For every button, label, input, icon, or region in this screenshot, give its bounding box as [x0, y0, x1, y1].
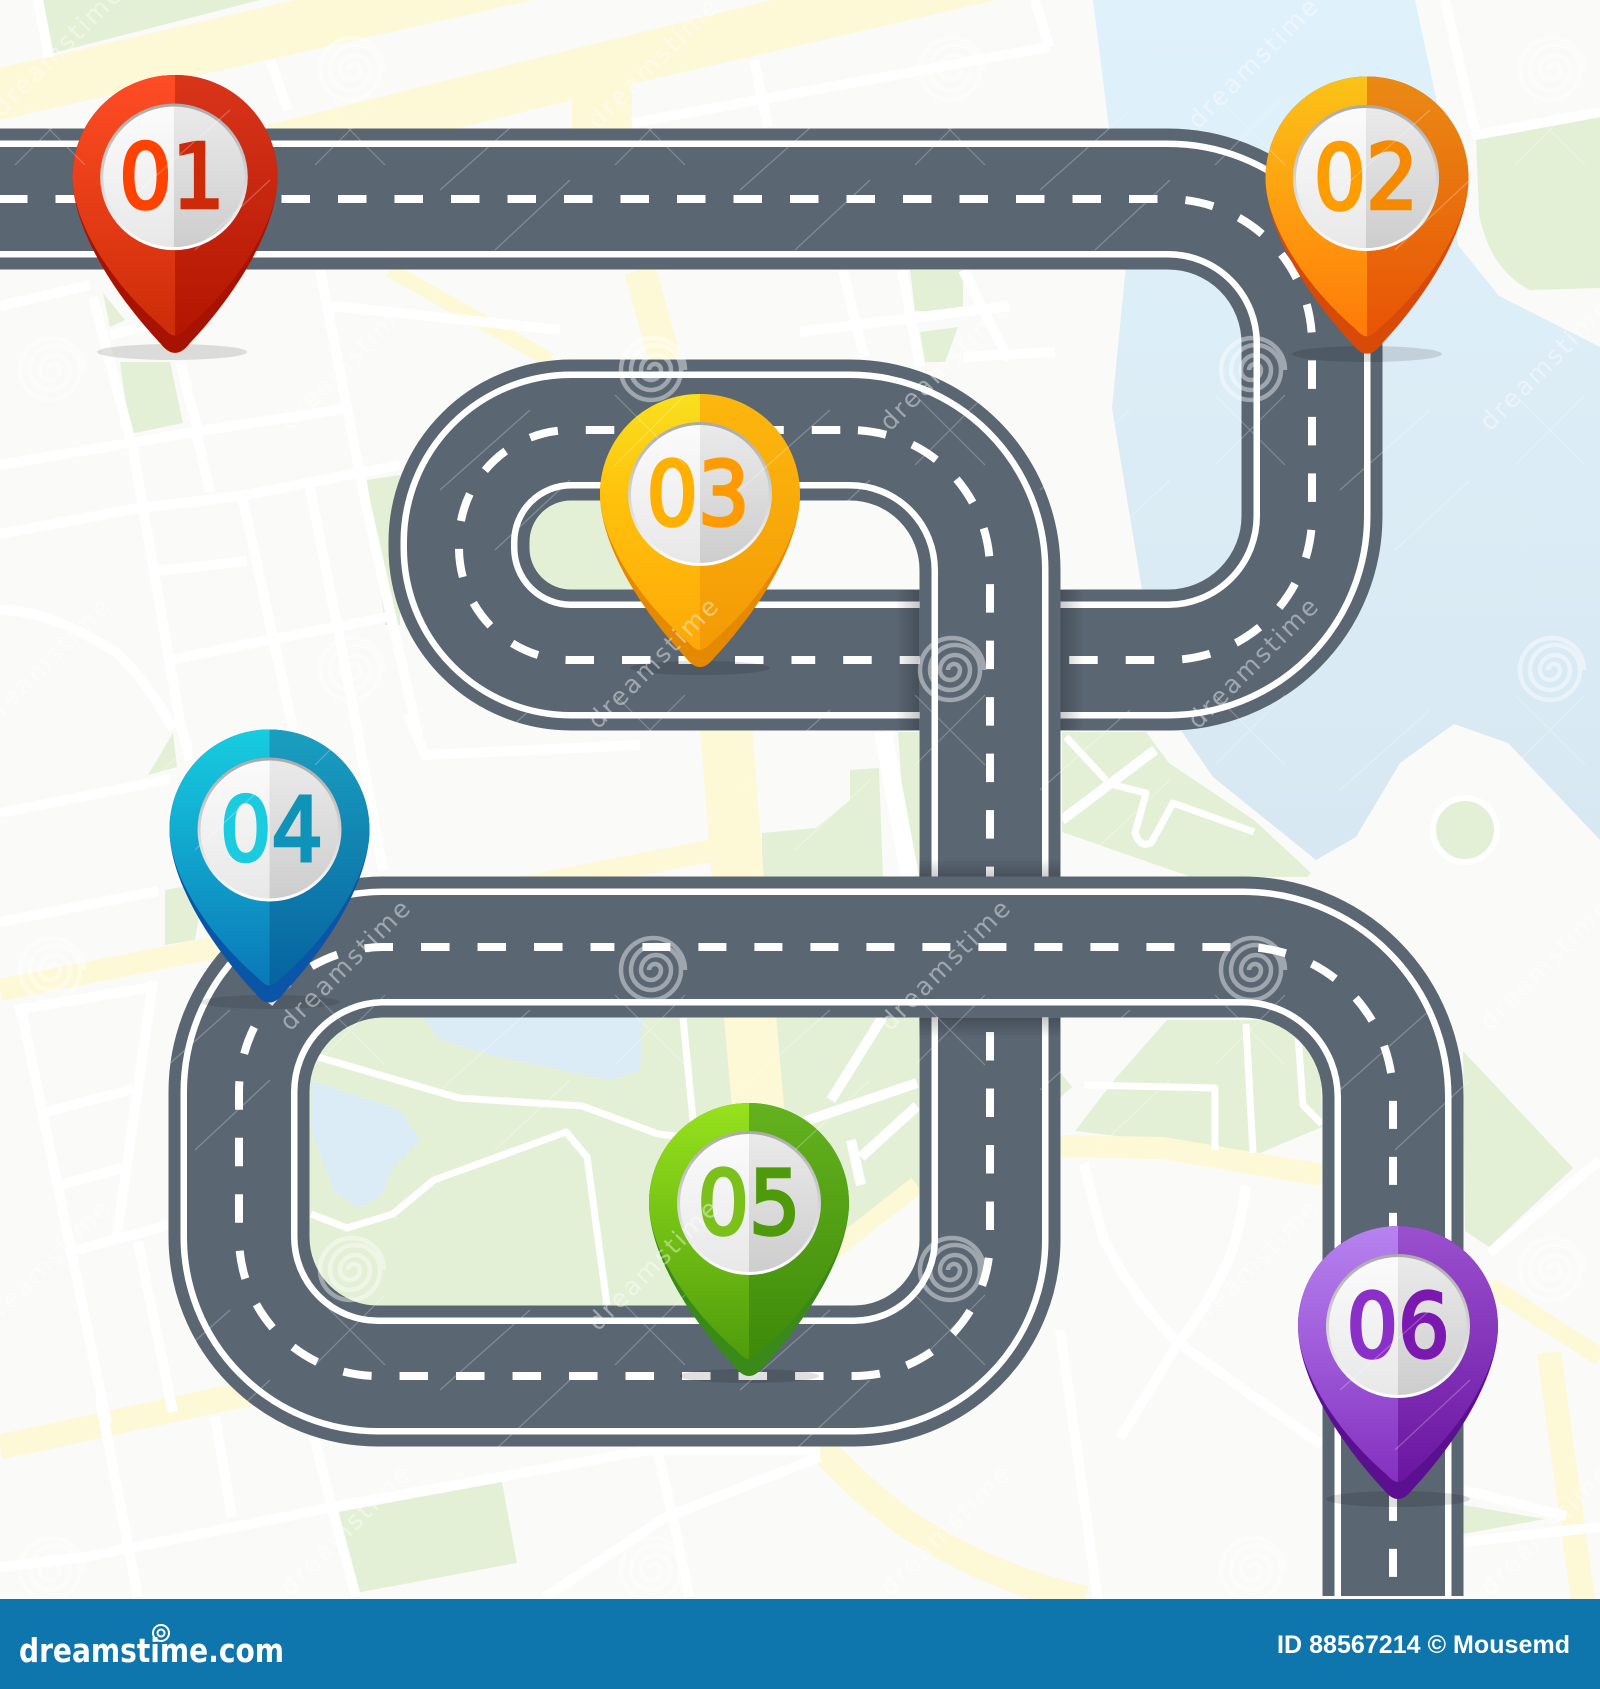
- brand logo text: dreamstime.com: [19, 1631, 284, 1670]
- pin 05 green: [649, 1103, 849, 1383]
- roundabout green circle: [1433, 798, 1497, 862]
- watermark text: dreamstime: [274, 1459, 416, 1601]
- pin 05 green: 05: [697, 1153, 801, 1255]
- brand spiral icon: [153, 1625, 169, 1641]
- watermark text: dreamstime: [1182, 592, 1324, 734]
- pin 06 purple: 06: [1346, 1276, 1450, 1378]
- overpass shadow on vertical road: [919, 858, 1060, 1038]
- watermark text: dreamstime: [1182, 1194, 1324, 1336]
- water: [1093, 0, 1600, 860]
- bottom brand bar: [0, 1599, 1600, 1689]
- pin 03 yellow: [600, 394, 800, 675]
- pin 04 blue: [170, 730, 370, 1009]
- watermark text: dreamstime: [582, 592, 724, 734]
- pin 01 red: 01: [119, 125, 225, 229]
- pin 02 orange: 02: [1314, 126, 1418, 230]
- ponds: [311, 1018, 643, 1208]
- road: lower loop: [239, 900, 990, 1376]
- image id credit: ID 88567214 © Mousemd: [1277, 1631, 1570, 1659]
- watermark text: dreamstime: [874, 894, 1016, 1036]
- overpass shadow on horizontal road: [895, 590, 1084, 730]
- pin 03 yellow: 03: [646, 444, 750, 546]
- watermark text: dreamstime: [582, 1194, 724, 1336]
- watermark text: dreamstime: [274, 894, 416, 1036]
- pin 04 blue: 04: [220, 779, 323, 881]
- road: final stretch to the bottom: [600, 947, 1393, 1596]
- pin 06 purple: [1298, 1226, 1498, 1507]
- road: start to right loop: [0, 199, 1312, 660]
- watermark text: dreamstime: [874, 294, 1016, 436]
- pin 02 orange: [1266, 76, 1468, 362]
- pin 01 red: [72, 75, 278, 360]
- watermark text: dreamstime: [874, 1459, 1016, 1601]
- road: left loop and vertical descent: [459, 430, 990, 900]
- watermark text: dreamstime: [274, 294, 416, 436]
